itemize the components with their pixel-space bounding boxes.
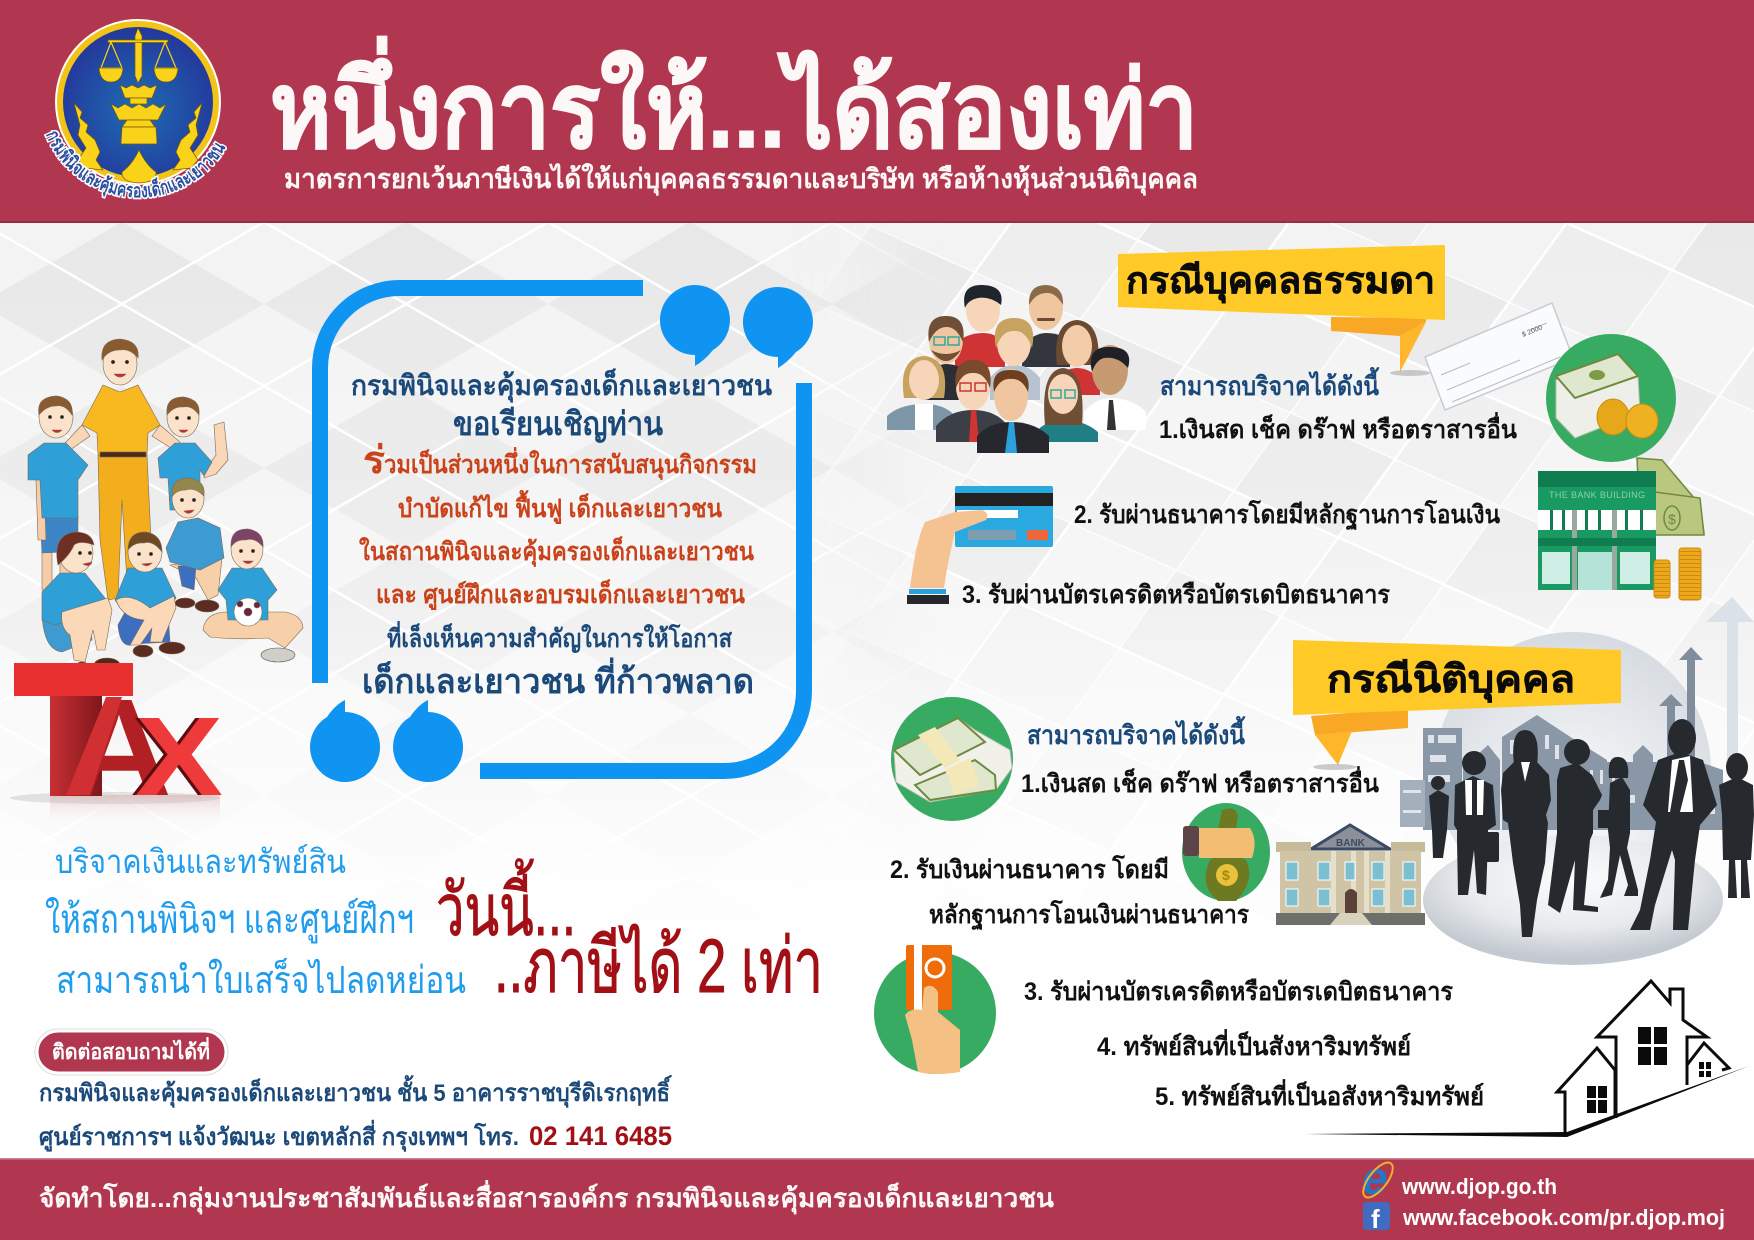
department logo emblem: กรมพินิจและคุ้มครองเด็กและเยาวชน xyxy=(44,130,228,200)
icon: bank building with money: $ xyxy=(1668,511,1676,527)
invitation body text in orange: วมเป็นส่วนหนึ่งในการสนับสนุนกิจกรรม xyxy=(384,447,757,481)
TAX 3D red letters: A xyxy=(66,671,172,825)
banner: juristic persons xyxy=(1293,640,1621,770)
invitation body text in orange: ร่ xyxy=(363,440,386,482)
list item 2 juristic, line one: 2. รับเงินผ่านธนาคาร โดยมี xyxy=(890,854,1169,884)
invitation closing line: ที่เล็งเห็นความสำคัญในการให้โอกาส xyxy=(387,621,733,653)
list: individual donation heading: สามารถบริจาคได้ดังนี้ xyxy=(1160,366,1380,401)
TAX 3D red letters: T xyxy=(14,630,133,835)
list item 4 juristic: 4. ทรัพย์สินที่เป็นสังหาริมทรัพย์ xyxy=(1097,1029,1411,1061)
donation call text in blue: ให้สถานพินิจฯ และศูนย์ฝึกฯ xyxy=(45,896,414,943)
department logo emblem xyxy=(44,19,228,200)
banner: juristic persons: กรณีนิติบุคคล xyxy=(1327,659,1575,703)
invitation text: cordially invite: ขอเรียนเชิญท่าน xyxy=(453,405,663,443)
main title: หนึ่งการให้...ได้สองเท่า xyxy=(270,36,1198,170)
contact address: กรมพินิจและคุ้มครองเด็กและเยาวชน ชั้น 5 อาคารราชบุรีดิเรกฤทธิ์ xyxy=(39,1074,672,1109)
opening quote marks xyxy=(310,700,463,782)
icon: group of people xyxy=(887,285,1146,453)
contact pill: ติดต่อสอบถามได้ที่ xyxy=(52,1036,210,1064)
list item 3 juristic: 3. รับผ่านบัตรเครดิตหรือบัตรเดบิตธนาคาร xyxy=(1024,978,1454,1006)
headline: today, tax deduction twice: ..ภาษีได้ 2 เท่า xyxy=(494,923,823,1009)
donation call text in blue xyxy=(45,843,466,1002)
icon: bank building with money xyxy=(1538,458,1704,600)
subtitle: มาตรการยกเว้นภาษีเงินได้ให้แก่บุคคลธรรมดาและบริษัท หรือห้างหุ้นส่วนนิติบุคคล xyxy=(284,163,1198,196)
list item 3 individual: 3. รับผ่านบัตรเครดิตหรือบัตรเดบิตธนาคาร xyxy=(962,581,1391,609)
website url: www.djop.go.th xyxy=(1401,1174,1557,1199)
banner: individuals: กรณีบุคคลธรรมดา xyxy=(1126,260,1435,304)
icon: hand holding credit card xyxy=(907,486,1053,604)
illustration: officer with children xyxy=(28,339,303,680)
icon: web browser: e xyxy=(1362,1152,1388,1204)
icon: bank building with money: THE BANK BUILDING xyxy=(1549,490,1645,500)
icon: bank cheque xyxy=(1425,303,1573,410)
standing child right xyxy=(158,397,228,510)
footer band xyxy=(0,1158,1754,1240)
donation call text in blue: สามารถนำใบเสร็จไปลดหย่อน xyxy=(56,957,466,1002)
headline: today, tax deduction twice xyxy=(436,858,823,1009)
invitation body text in orange: ในสถานพินิจและคุ้มครองเด็กและเยาวชน xyxy=(359,536,754,568)
list item 1 individual: 1.เงินสด เช็ค ดร๊าฟ หรือตราสารอื่น xyxy=(1159,412,1517,444)
headline: today, tax deduction twice: วันนี้... xyxy=(436,858,576,951)
icon: facebook xyxy=(1363,1202,1390,1234)
TAX 3D red letters: X xyxy=(135,694,223,819)
seated child back right xyxy=(166,478,224,612)
banner: individuals xyxy=(1118,245,1445,376)
invitation body text in orange: บำบัดแก้ไข ฟื้นฟู เด็กและเยาวชน xyxy=(398,489,722,525)
invitation text: department: กรมพินิจและคุ้มครองเด็กและเยาวชน xyxy=(351,368,772,403)
list item 2 juristic, line two: หลักฐานการโอนเงินผ่านธนาคาร xyxy=(929,899,1250,931)
donation call text in blue: บริจาคเงินและทรัพย์สิน xyxy=(55,843,346,880)
icon: hand holding orange card xyxy=(874,945,996,1074)
silhouettes of business people xyxy=(1429,719,1754,937)
icon: classical bank building xyxy=(1276,825,1425,925)
officer xyxy=(64,339,180,600)
facebook url: www.facebook.com/pr.djop.moj xyxy=(1402,1205,1725,1230)
seated child right with football xyxy=(203,529,303,662)
icon: facebook: f xyxy=(1371,1204,1380,1234)
TAX 3D red letters xyxy=(10,630,223,835)
icon: banded money stacks xyxy=(891,697,1013,821)
invitation body text in orange: และ ศูนย์ฝึกและอบรมเด็กและเยาวชน xyxy=(376,579,745,611)
standing child left xyxy=(28,396,88,590)
list item 2 individual: 2. รับผ่านธนาคารโดยมีหลักฐานการโอนเงิน xyxy=(1074,499,1500,531)
icon: houses on a rising line xyxy=(1305,981,1749,1137)
invitation body text in orange xyxy=(359,440,757,611)
icon: bank cheque: $ 2000 xyxy=(1521,324,1544,339)
footer credit text: จัดทำโดย...กลุ่มงานประชาสัมพันธ์และสื่อสารองค์กร กรมพินิจและคุ้มครองเด็กและเยาวชน xyxy=(39,1179,1054,1215)
icon: classical bank building: BANK xyxy=(1336,838,1366,849)
TAX 3D red letters: X xyxy=(131,694,219,819)
decorative rising arrows and city xyxy=(1400,597,1754,965)
closing quote marks xyxy=(660,285,813,368)
contact pill xyxy=(35,1029,228,1075)
contact address: ศูนย์ราชการฯ แจ้งวัฒนะ เขตหลักสี่ กรุงเทพฯ โทร. xyxy=(39,1119,519,1153)
icon: web browser xyxy=(1358,1152,1398,1204)
list item 1 juristic: 1.เงินสด เช็ค ดร๊าฟ หรือตราสารอื่น xyxy=(1021,766,1379,798)
seated child left xyxy=(42,532,120,680)
seated child centre xyxy=(115,532,185,657)
list item 5 juristic: 5. ทรัพย์สินที่เป็นอสังหาริมทรัพย์ xyxy=(1155,1079,1484,1111)
contact address: 02 141 6485 xyxy=(529,1121,672,1151)
header band xyxy=(0,0,1754,223)
quote frame xyxy=(310,285,813,782)
invitation closing emphasis: เด็กและเยาวชน ที่ก้าวพลาด xyxy=(362,657,754,701)
icon: hand with money bag: $ xyxy=(1222,867,1230,883)
list: juristic donation heading: สามารถบริจาคได้ดังนี้ xyxy=(1027,715,1246,750)
contact address xyxy=(39,1074,672,1153)
icon: hand with money bag xyxy=(1182,803,1270,901)
icon: cash stack in green circle xyxy=(1546,334,1676,462)
